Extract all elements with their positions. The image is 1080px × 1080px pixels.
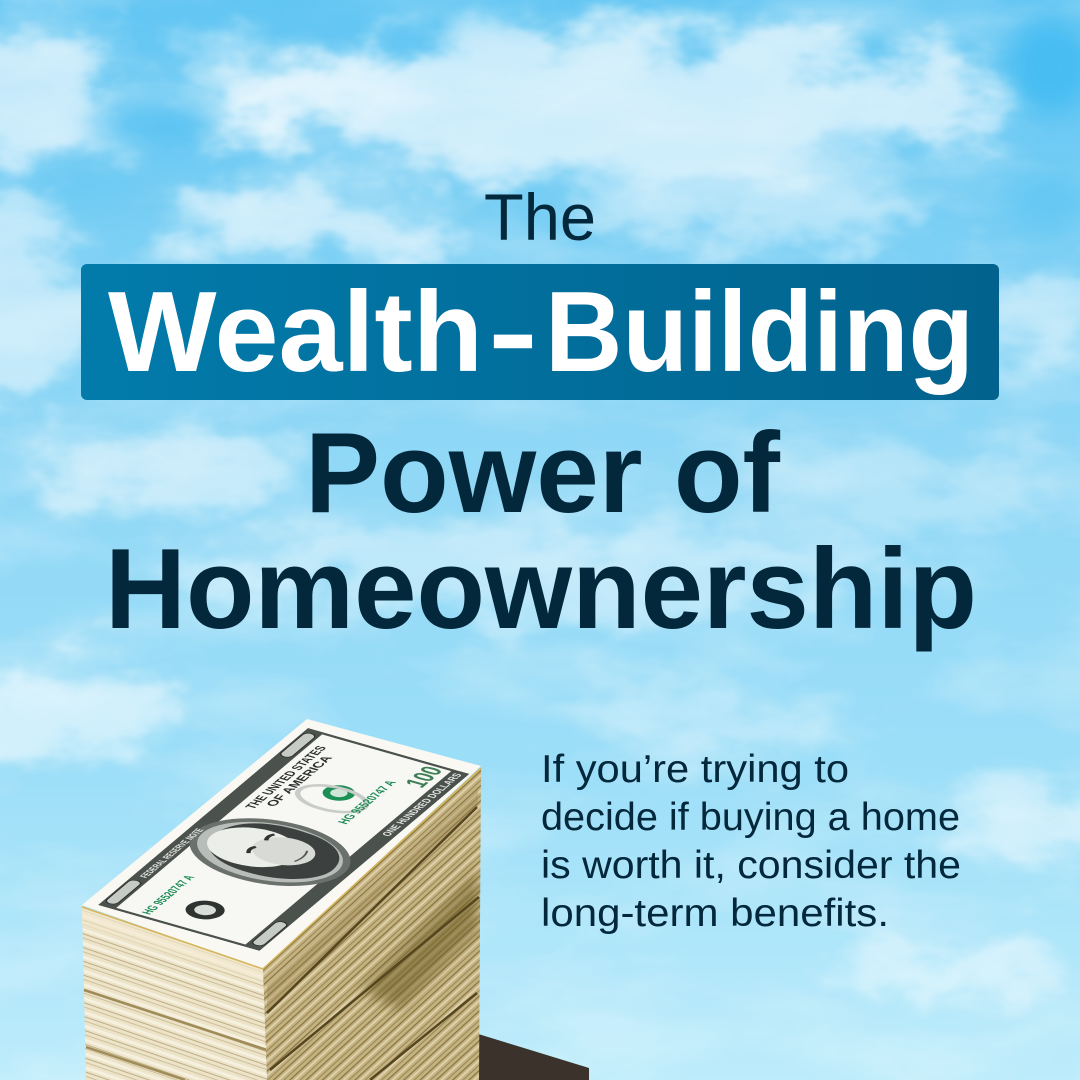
- text block: intro: long-term benefits.: [541, 892, 889, 935]
- banner: Wealth-Building: [81, 264, 999, 400]
- bill text: HG 95520747 A: [140, 874, 198, 916]
- text block: intro: is worth it, consider the: [541, 844, 961, 887]
- top banknote: [98, 728, 470, 951]
- title: Power of: Power of: [305, 410, 781, 537]
- text block: intro: [541, 748, 961, 935]
- banner: Wealth-Building: -: [488, 269, 538, 396]
- top banknote: THE UNITED STATES: [243, 745, 330, 810]
- banner: Wealth-Building: Building: [545, 269, 974, 396]
- top banknote: FEDERAL RESERVE NOTE: [137, 827, 206, 879]
- portrait oval: [190, 818, 350, 886]
- icon: stack of dollar bills: [82, 719, 481, 1080]
- text block: intro: If you’re trying to: [541, 748, 849, 791]
- house shadow block: [475, 1033, 589, 1080]
- top banknote: OF AMERICA: [264, 755, 336, 808]
- banner: Wealth-Building: Wealth: [108, 269, 483, 396]
- text block: intro: decide if buying a home: [541, 796, 960, 839]
- title: The: The: [484, 180, 596, 254]
- green seal: [322, 785, 355, 801]
- top banknote: 100: [398, 763, 449, 790]
- top banknote: HG 95520747 A: [336, 779, 400, 826]
- corner numerals: [106, 733, 316, 946]
- paper edge of top bill: [82, 719, 481, 969]
- right page face: [263, 768, 481, 1080]
- left page face: [82, 906, 267, 1080]
- title: Homeownership: Homeownership: [105, 526, 977, 653]
- top banknote: ONE HUNDRED DOLLARS: [380, 772, 464, 837]
- black seal: [186, 900, 225, 920]
